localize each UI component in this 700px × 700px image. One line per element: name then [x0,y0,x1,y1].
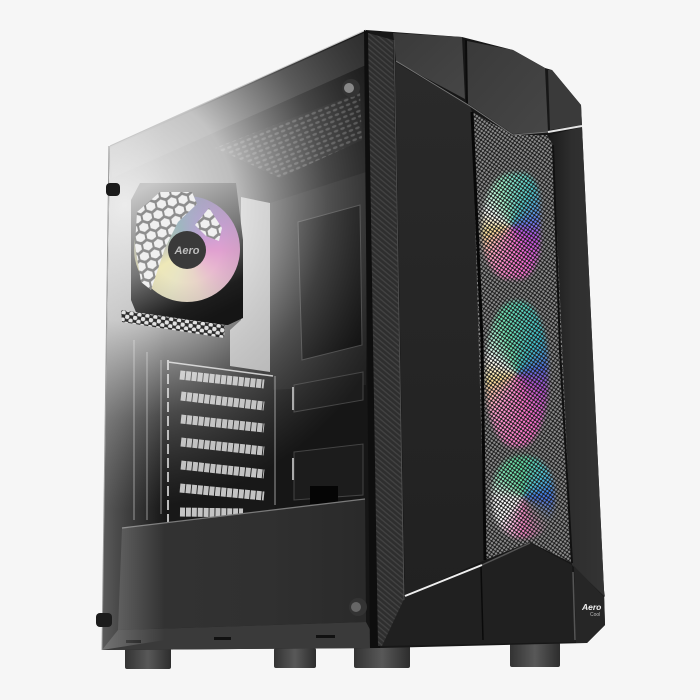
thumbscrews [96,79,367,627]
motherboard cutout [298,205,362,360]
perforated side band [368,33,405,646]
PSU shroud [118,499,366,630]
rubber feet [125,642,560,669]
interior base [102,30,378,650]
glass side panel with interior [102,30,380,650]
main black panel [395,62,485,596]
glass left haze [102,121,165,650]
fan frame [131,183,243,325]
top rail of chassis [110,32,366,178]
logo badge: Aero [581,602,601,612]
panel silhouette [366,30,605,648]
upper left block [393,33,465,99]
top fan [479,170,543,282]
product photo: PC tower case [96,30,605,669]
bottom fan [487,452,559,542]
mesh sheet [474,113,571,562]
front vertical seams [481,566,483,640]
logo badge [581,602,601,618]
fan disc [134,196,240,302]
bottom rail [102,622,380,650]
rear RGB fan [131,183,243,325]
logo badge: Cool [590,612,600,618]
honeycomb grille right [195,208,222,241]
PCI slot plate [168,360,275,522]
middle fan [484,298,550,450]
fan hub [168,231,206,269]
fan bracket vents [121,310,225,338]
slot vents [180,375,264,513]
honeycomb grille [135,192,197,290]
white rear wall [230,197,270,372]
drive bays [294,372,363,500]
light streaks [396,61,548,135]
rear chassis lines [134,340,161,520]
glass haze [102,30,378,650]
hub logo: Aero [173,245,200,257]
lower right corner with logo [574,566,605,643]
motherboard tray backing [270,172,366,390]
lower main block [382,543,576,646]
right side panel [550,127,605,597]
mesh intake with RGB fans [474,113,571,562]
panel corner edge [364,30,380,648]
front panel [364,30,605,648]
perforated ceiling [215,92,362,178]
upper centre block [467,41,548,134]
upper right block [548,70,582,130]
